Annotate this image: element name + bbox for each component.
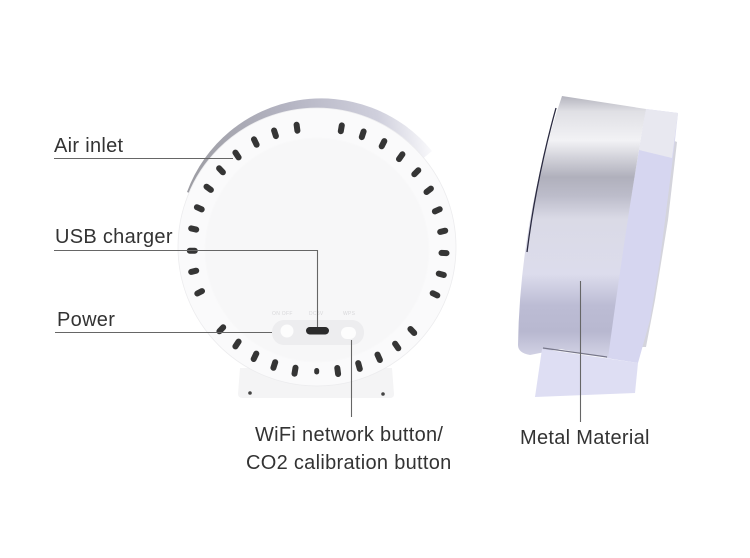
- leader: power: [55, 332, 272, 334]
- metal arc behind device: [187, 98, 432, 247]
- power button: [280, 324, 294, 338]
- port labels: ON OFF: [272, 311, 293, 317]
- leader: USB charger: [54, 250, 318, 327]
- inner disc: [205, 138, 429, 362]
- stand screw holes: [248, 391, 385, 396]
- device back view: [178, 98, 456, 398]
- port labels: WPS: [343, 311, 356, 317]
- rear lilac band: [606, 109, 678, 363]
- air vents: [190, 125, 447, 374]
- stand: [238, 368, 394, 398]
- device side view: [518, 96, 678, 397]
- label: USB charger: USB charger: [55, 226, 173, 248]
- label: CO2 calibration button: CO2 calibration button: [246, 452, 452, 474]
- label: Air inlet: Air inlet: [54, 135, 124, 157]
- port labels: DC5V: [309, 311, 324, 317]
- WiFi button: [341, 327, 356, 339]
- dark front edge: [527, 108, 556, 252]
- port labels: [272, 311, 356, 317]
- label: Power: Power: [57, 309, 115, 331]
- leader: metal material: [580, 281, 582, 422]
- leader: air inlet: [54, 158, 233, 160]
- label: Metal Material: Metal Material: [520, 427, 650, 449]
- round back panel: [178, 108, 456, 386]
- USB port: [306, 327, 329, 334]
- rear edge strip: [640, 140, 677, 347]
- label: WiFi network button: WiFi network button/: [255, 424, 443, 446]
- callout leader lines: [54, 158, 580, 422]
- foot shadow line: [543, 348, 607, 357]
- leader: WiFi button: [350, 340, 352, 417]
- button recess: [272, 320, 364, 345]
- metal body: [518, 96, 646, 358]
- foot stand: [535, 349, 638, 397]
